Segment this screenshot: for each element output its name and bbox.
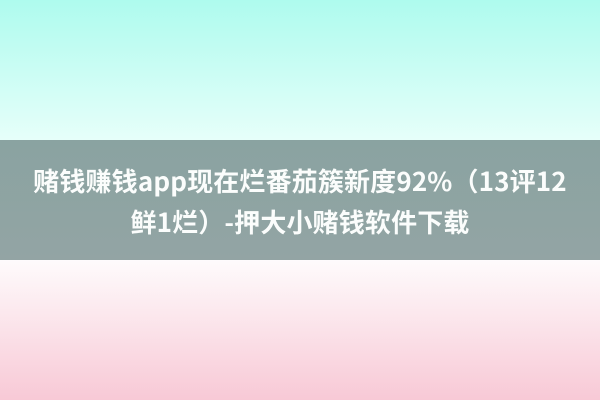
- title: [33, 162, 567, 240]
- title band: [0, 140, 600, 260]
- title: 鲜1烂）-押大小赌钱软件下载: [130, 203, 470, 240]
- title: 赌钱赚钱app现在烂番茄簇新度92%（13评12: [33, 162, 567, 199]
